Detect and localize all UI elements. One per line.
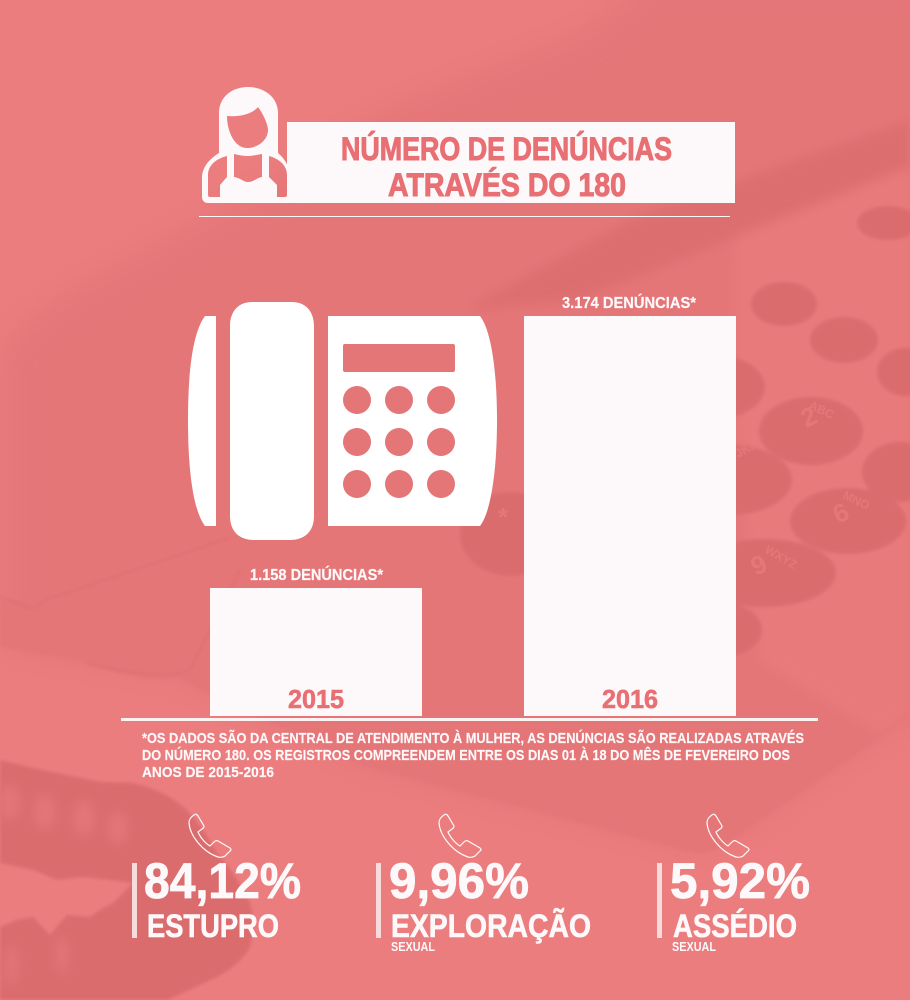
key labels: 9 [746,548,772,581]
footnote: *OS DADOS SÃO DA CENTRAL DE ATENDIMENTO À MULHER, AS DENÚNCIAS SÃO REALIZADAS ATRAVÉS [142,729,804,747]
coil highlights [0,784,128,985]
stat: assédio [657,814,810,954]
axis line [121,718,818,721]
key labels [498,398,872,581]
label 2016: 3.174 DENÚNCIAS* [562,293,697,312]
bar chart [210,293,736,716]
ridge [464,120,910,310]
label 2015: 1.158 DENÚNCIAS* [250,565,384,584]
icon: woman [202,87,290,203]
key labels: WXYZ [762,542,800,572]
stat: estupro [132,814,301,944]
sharper lower phone body edge [366,600,910,853]
bar 2016 [524,316,736,716]
key labels: 2 [796,400,822,433]
icon: handset [439,814,481,857]
keys [460,206,910,660]
footnote [142,729,804,781]
thin lines in phone body [0,537,240,675]
stat: exploração: 9,96% [389,853,529,909]
title line 2: ATRAVÉS DO 180 [388,167,626,203]
key labels: 6 [828,496,854,529]
footnote: DO NÚMERO 180. OS REGISTROS COMPREENDEM ENTRE OS DIAS 01 À 18 DO MÊS DE FEVEREIRO DOS [142,746,790,764]
icon: handset [189,814,231,857]
stat: exploração: SEXUAL [391,939,435,954]
stat: estupro: 84,12% [144,853,301,909]
title line 1: NÚMERO DE DENÚNCIAS [341,131,672,167]
keypad area [737,170,910,735]
stat: assédio: ASSÉDIO [673,908,797,944]
bar 2016: 2016 [602,684,658,714]
stat: exploração [376,814,591,954]
icon: desk telephone [188,302,497,540]
stat: exploração: EXPLORAÇÃO [391,908,591,944]
telephone coil [0,760,253,1000]
key labels: MNO [841,488,872,513]
title banner [287,122,735,203]
stat: assédio: 5,92% [670,853,810,909]
stat: estupro: ESTUPRO [147,908,279,944]
bar 2015 [210,588,422,716]
stat: assédio: SEXUAL [672,939,716,954]
header divider [199,216,730,217]
key labels: ABC [807,398,837,422]
bar 2015: 2015 [288,684,344,714]
key labels: JKL [732,437,759,461]
footnote: ANOS DE 2015-2016 [142,764,274,781]
key labels: * [498,502,509,532]
icon: handset [707,814,749,857]
